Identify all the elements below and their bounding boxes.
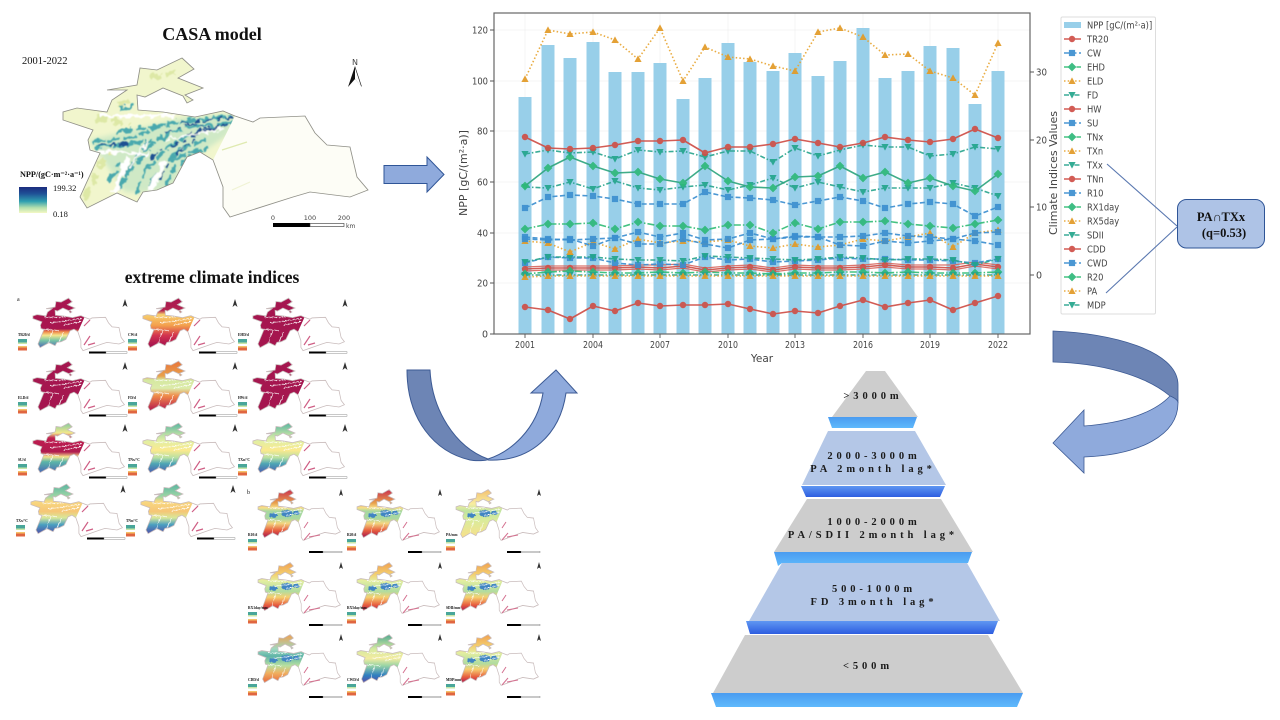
- panel a: extreme temperature index maps: [16, 297, 348, 540]
- tier: above 3000m: >3000m: [843, 391, 903, 402]
- map: TNn: [126, 484, 236, 540]
- line: FD teal: [525, 145, 998, 162]
- map: RX1day: [248, 562, 343, 626]
- left axis tick labels: 80: [477, 126, 488, 138]
- axis ticks: [490, 30, 1034, 338]
- left axis tick labels: 120: [472, 26, 488, 36]
- map: CWD: CWD/d: [347, 678, 359, 682]
- chart legend: CDD: [1087, 245, 1106, 256]
- left axis tick labels: 40: [477, 228, 488, 240]
- legend: NPP colour ramp: [19, 170, 84, 219]
- map: CDD: CDD/d: [248, 678, 259, 682]
- map: PA: [446, 489, 541, 553]
- arrow: curved from chart to pyramid: [1053, 331, 1178, 473]
- chart legend: TXx: [1086, 161, 1103, 172]
- right axis title: Climate Indices Values: [1047, 111, 1060, 235]
- map: TXx: [16, 484, 126, 540]
- tier: 1000-2000m: 1000-2000m: [827, 517, 921, 528]
- left axis tick labels: [472, 26, 488, 340]
- line: TXx teal: [525, 178, 998, 196]
- tier: 500-1000m: 500-1000m: [832, 584, 916, 595]
- callout: PA and TXx interaction: (q=0.53): [1202, 226, 1246, 240]
- map: CWD: [347, 634, 442, 698]
- chart legend: FD: [1087, 91, 1098, 102]
- bars: NPP: [518, 28, 1004, 334]
- map: TNn: TNn/°C: [126, 519, 138, 523]
- map: ELD: ELD/d: [18, 396, 28, 400]
- scale bar: 100: [304, 214, 316, 222]
- connector lines: legend to callout: [1106, 164, 1177, 293]
- map: MDP: [446, 634, 541, 698]
- map: PA: PA/mm: [446, 533, 458, 537]
- scale bar: km: [346, 223, 355, 230]
- map: EHD: EHD/d: [238, 333, 249, 337]
- map: ELD: [18, 361, 128, 416]
- tier: 1000-2000m: PA/SDII 2month lag*: [788, 530, 958, 541]
- axes frame: [494, 13, 1030, 334]
- callout: PA and TXx interaction: PA∩TXx: [1197, 210, 1246, 224]
- chart: NPP bars and climate index lines: [457, 13, 1060, 365]
- map: SDII: [446, 562, 541, 626]
- line: TNx green: [525, 157, 998, 191]
- tier: 2000-3000m: [801, 431, 946, 497]
- icon: north arrow: [348, 58, 362, 87]
- map: RX5day: [347, 562, 442, 626]
- tier: 2000-3000m: 2000-3000m: [827, 451, 921, 462]
- line: MDP teal: [525, 256, 998, 265]
- map: R10: [248, 489, 343, 553]
- line: PA orange: [525, 28, 998, 95]
- chart legend: TR20: [1086, 35, 1109, 46]
- map: FD: FD/d: [128, 396, 136, 400]
- line: R20 green: [525, 271, 998, 274]
- chart legend: NPP [gC/(m²·a)]: [1087, 21, 1152, 32]
- x axis title: Year: [750, 353, 774, 365]
- arrow: U-turn from climate maps to chart: [407, 370, 577, 461]
- right axis tick labels: 10: [1036, 202, 1047, 214]
- left axis tick labels: 60: [477, 178, 488, 188]
- tier: 2000-3000m: PA 2month lag*: [810, 464, 936, 475]
- panel b: extreme precipitation index maps: [247, 489, 541, 698]
- chart legend: SDII: [1087, 231, 1104, 242]
- left axis title: NPP [gC/(m²·a)]: [457, 130, 470, 216]
- map: RX1day: RX1day/mm: [248, 606, 268, 610]
- x axis tick labels: 2016: [853, 340, 873, 351]
- map: R20: R20/d: [347, 533, 356, 537]
- tier: below 500m: <500m: [843, 661, 893, 672]
- map period label: 2001-2022: [22, 56, 68, 67]
- line: CW blue: [525, 237, 998, 248]
- chart legend: SU: [1087, 119, 1098, 130]
- map: CW: CW/d: [128, 333, 137, 337]
- line: SU blue: [525, 192, 998, 216]
- map: TNx: TNx/°C: [128, 458, 140, 462]
- pyramid: elevation tiers and lag effects: [711, 371, 1023, 707]
- line: TR20 red: [525, 129, 998, 153]
- map: TR20: TR20/d: [18, 333, 30, 337]
- map: TXn: TXn/°C: [238, 458, 250, 462]
- x axis tick labels: 2013: [785, 340, 805, 351]
- line: TNn red: [525, 264, 998, 270]
- panel letter a: a: [17, 297, 20, 303]
- map: EHD: [238, 298, 348, 354]
- map: MDP: MDP/mm: [446, 678, 461, 682]
- map: CDD: [248, 634, 343, 698]
- chart legend: RX1day: [1087, 203, 1120, 214]
- title: CASA model: CASA model: [162, 24, 262, 44]
- right axis tick labels: [1036, 68, 1047, 282]
- chart legend: CWD: [1087, 259, 1108, 270]
- scale bar: 0: [271, 214, 275, 222]
- x axis tick labels: 2004: [583, 340, 603, 351]
- panel: CASA NPP map: [19, 56, 368, 230]
- map: R20: [347, 489, 442, 553]
- map: SU: SU/d: [18, 458, 26, 462]
- chart legend: ELD: [1087, 77, 1103, 88]
- line: CDD low red: [525, 296, 998, 319]
- map: R10: R10/d: [248, 533, 257, 537]
- x axis tick labels: 2022: [988, 340, 1008, 351]
- heading: extreme climate indices: extreme climate indices: [125, 267, 299, 287]
- chart legend: MDP: [1087, 301, 1106, 312]
- line: CWD blue: [525, 232, 998, 240]
- legend: NPP colour ramp: 0.18: [53, 209, 68, 219]
- map: HW: HW/d: [238, 396, 247, 400]
- chart legend: TNx: [1086, 133, 1103, 144]
- lines: red bundle: [525, 262, 998, 272]
- map: TXn: [238, 423, 348, 478]
- legend: NPP colour ramp: 199.32: [53, 183, 76, 193]
- map: TR20: [18, 298, 128, 354]
- tier: 1000-2000m: [774, 499, 973, 566]
- x axis tick labels: 2010: [718, 340, 738, 351]
- chart legend: RX5day: [1087, 217, 1120, 228]
- left axis tick labels: 100: [472, 76, 488, 88]
- tier: 500-1000m: [746, 563, 1000, 634]
- x axis tick labels: 2019: [920, 340, 940, 351]
- chart legend: [1061, 17, 1156, 314]
- chart legend: R10: [1087, 189, 1104, 200]
- chart legend: PA: [1087, 287, 1098, 298]
- scale bar: [271, 214, 355, 230]
- map: TNx: [128, 423, 238, 478]
- arrow: map to chart: [384, 157, 444, 192]
- scale bar: 200: [338, 214, 350, 222]
- line: TXn orange: [525, 276, 998, 277]
- x axis tick labels: [515, 340, 1008, 351]
- callout: PA and TXx interaction: [1178, 200, 1264, 248]
- chart legend: CW: [1087, 49, 1101, 60]
- tier: below 500m: [711, 635, 1023, 707]
- chart legend: EHD: [1087, 63, 1105, 74]
- map: HW: [238, 361, 348, 416]
- line: RX5day orange: [525, 230, 998, 252]
- map: FD: [128, 361, 238, 416]
- map: TXx: TXx/°C: [16, 519, 28, 523]
- chart legend: R20: [1087, 273, 1104, 284]
- line: RX1day green: [525, 220, 998, 233]
- left axis tick labels: 0: [482, 330, 488, 340]
- icon: north arrow: N: [352, 58, 358, 67]
- left axis tick labels: 20: [477, 278, 488, 290]
- chart legend: TXn: [1086, 147, 1103, 158]
- x axis tick labels: 2007: [650, 340, 670, 351]
- line: R10 blue: [525, 257, 998, 265]
- map: NPP distribution: [63, 58, 368, 217]
- legend: NPP colour ramp: NPP/(gC·m⁻²·a⁻¹): [20, 170, 84, 179]
- right axis tick labels: 20: [1036, 136, 1047, 146]
- map: SDII: SDII/mm: [446, 606, 460, 610]
- right axis tick labels: 0: [1036, 270, 1042, 282]
- map: RX5day: RX5day/mm: [347, 606, 367, 610]
- x axis tick labels: 2001: [515, 340, 535, 351]
- line: SDII teal: [525, 274, 998, 276]
- map: CW: [128, 298, 238, 354]
- chart legend: TNn: [1086, 175, 1104, 186]
- right axis tick labels: 30: [1036, 68, 1047, 78]
- tier: 500-1000m: FD 3month lag*: [811, 597, 937, 608]
- tier: above 3000m: [828, 371, 918, 428]
- map: SU: [18, 423, 128, 478]
- panel letter b: b: [247, 490, 250, 496]
- chart legend: HW: [1087, 105, 1102, 116]
